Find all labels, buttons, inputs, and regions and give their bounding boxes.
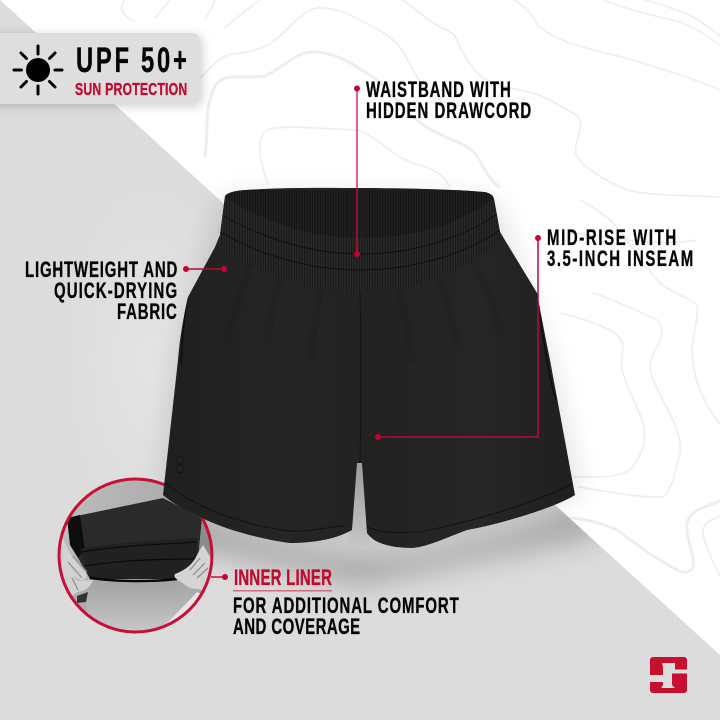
- text: waistband: HIDDEN DRAWCORD: [366, 98, 531, 123]
- text: inner liner description: [233, 593, 459, 639]
- text: mid-rise: MID-RISE WITH: [547, 225, 676, 250]
- text: fabric: FABRIC: [117, 299, 177, 324]
- shorts: centre seam: [360, 290, 362, 463]
- shorts: embossed logo: [176, 456, 184, 473]
- background: faint shadow around shorts: [163, 196, 580, 543]
- underline: [233, 590, 332, 592]
- callout: mid-rise: [375, 225, 693, 440]
- badge panel: [0, 33, 200, 104]
- product photo: black shorts: [163, 188, 575, 548]
- leader line: inner liner: [211, 574, 228, 580]
- text: waistband: WAISTBAND WITH: [366, 77, 511, 102]
- text: inner liner description: AND COVERAGE: [233, 614, 360, 639]
- text: fabric: LIGHTWEIGHT AND: [25, 257, 177, 282]
- heading: inner liner: INNER LINER: [234, 565, 332, 590]
- inset photo: inner liner close-up: [58, 478, 214, 634]
- shorts: side pockets: [181, 293, 556, 400]
- inset ring: [59, 479, 212, 632]
- text: inner liner description: FOR ADDITIONAL COMFORT: [233, 593, 459, 618]
- callout: waistband: [354, 77, 531, 257]
- background: topographic contour lines: [122, 0, 720, 583]
- text: fabric: [25, 257, 177, 324]
- shorts: fabric gathers: [225, 262, 500, 360]
- background: shadow visible between the legs: [348, 460, 370, 545]
- background: soft highlight and hem shadow: [60, 170, 600, 585]
- sun protection badge: [0, 33, 200, 104]
- leader line: fabric: [183, 266, 227, 272]
- leader line: waistband: [354, 86, 360, 257]
- shorts: front waistband: [218, 197, 502, 281]
- callout: lightweight fabric: [25, 257, 227, 324]
- heading: UPF 50+: UPF 50+: [76, 42, 187, 80]
- leader line: mid-rise: [375, 235, 541, 440]
- shorts: inside back waistband: [225, 190, 494, 240]
- text: mid-rise: 3.5-INCH INSEAM: [547, 246, 693, 271]
- icon: sun: [14, 46, 62, 94]
- subheading: sun protection: SUN PROTECTION: [75, 80, 187, 100]
- callout: inner liner: [211, 565, 459, 639]
- icon: red S logo: [650, 657, 687, 693]
- text: mid-rise: [547, 225, 693, 271]
- shorts body: [163, 188, 575, 548]
- text: fabric: QUICK-DRYING: [54, 278, 177, 303]
- shorts: hem stitching: [166, 483, 572, 533]
- text: waistband: [366, 77, 531, 123]
